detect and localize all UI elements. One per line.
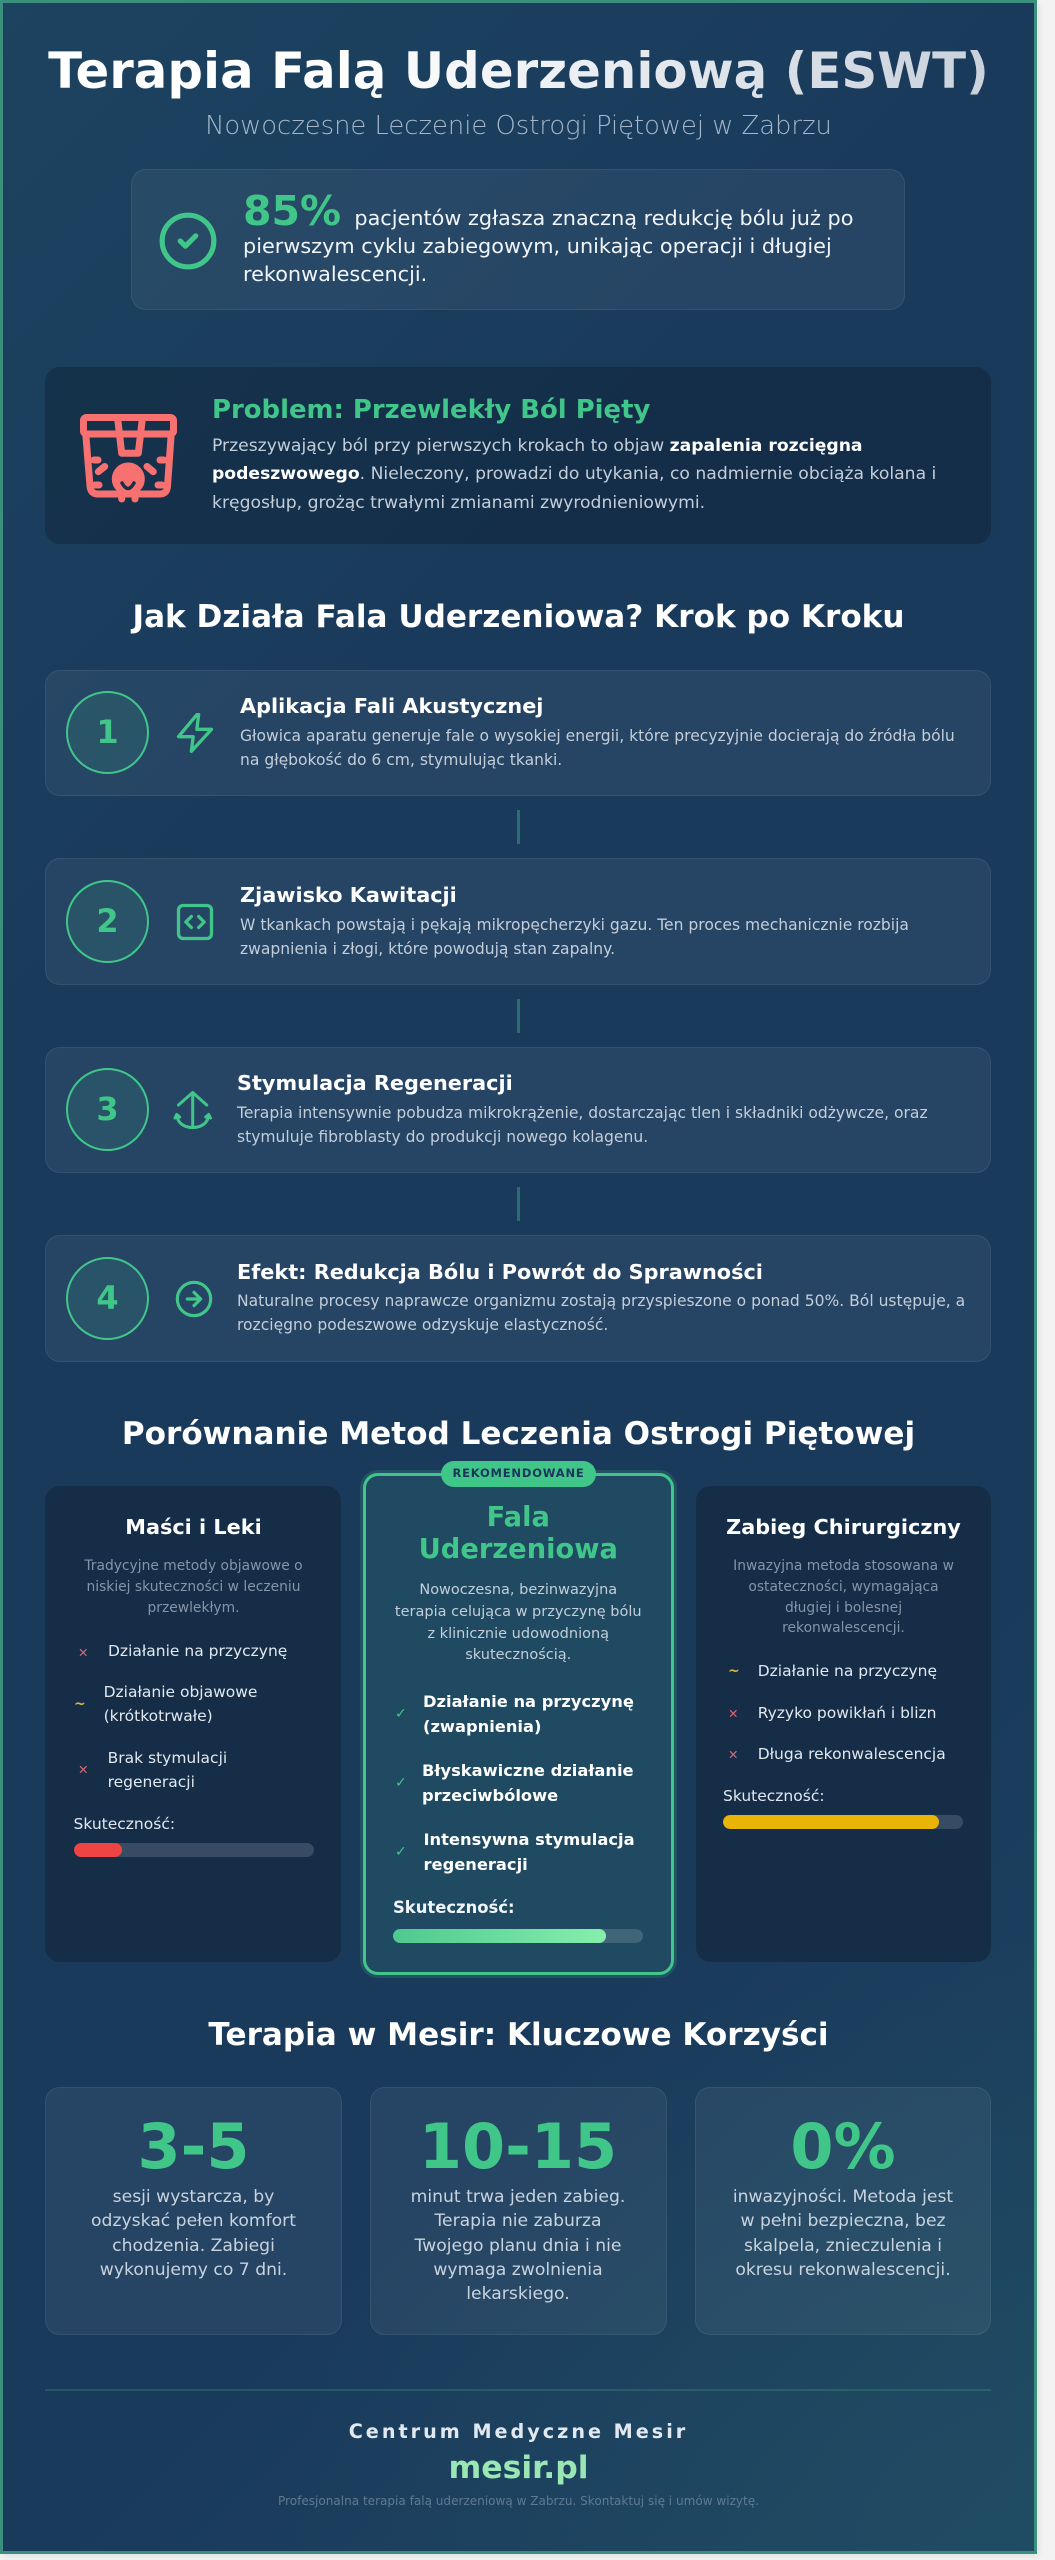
- card 2 description: terapia celująca w przyczynę bólu: [395, 1604, 642, 1620]
- sessions text: [91, 2187, 296, 2280]
- footer website: mesir.pl: [448, 2450, 589, 2486]
- panel: ointments and drugs: [45, 1486, 341, 1962]
- callout text: [243, 187, 853, 286]
- panel: step 3: [45, 1046, 991, 1173]
- card 1 description: przewlekłym.: [148, 1600, 239, 1616]
- card 3 item 2: Ryzyko powikłań i blizn: [758, 1704, 937, 1722]
- icon: anchor arrows: [174, 1090, 212, 1129]
- icon: arrow circle: [176, 1280, 212, 1318]
- card 1 item 1: ✕: [78, 1645, 88, 1660]
- callout text: 85% pacjentów zgłasza znaczną redukcję bólu już po: [243, 187, 853, 235]
- footer note: Profesjonalna terapia falą uderzeniową w Zabrzu. Skontaktuj się i umów wizytę.: [278, 2494, 759, 2508]
- heading: how it works: Jak Działa Fala Uderzeniowa? Krok po Kroku: [132, 599, 904, 635]
- card 2 item 1: [395, 1692, 634, 1736]
- panel: problem: [45, 367, 991, 544]
- non-invasive text: w pełni bezpieczna, bez: [740, 2211, 946, 2231]
- card 2 description: Nowoczesna, bezinwazyjna: [419, 1582, 617, 1598]
- card 3 effectiveness bar: [723, 1815, 963, 1829]
- heading: comparison: Porównanie Metod Leczenia Ostrogi Piętowej: [122, 1416, 915, 1452]
- step 3 text: Terapia intensywnie pobudza mikrokrążenie, dostarczając tlen i składniki odżywcze, oraz: [237, 1104, 928, 1122]
- step 3 number: 3: [96, 1090, 119, 1128]
- card 2 item 3: [395, 1830, 635, 1874]
- card 1 effectiveness label: Skuteczność:: [74, 1815, 175, 1833]
- non-invasive text: skalpela, znieczulenia i: [744, 2236, 942, 2256]
- step 1 text: [240, 727, 955, 769]
- card 2 title: [419, 1502, 618, 1565]
- card 2 item 1: ✓: [395, 1706, 407, 1722]
- connector 3: [517, 1187, 520, 1221]
- card 1 item 3: Brak stymulacji: [108, 1749, 227, 1767]
- card 2 effectiveness bar: [393, 1929, 643, 1943]
- sessions text: chodzenia. Zabiegi: [112, 2236, 275, 2256]
- panel: step 1: [45, 670, 991, 796]
- card 1 item 1: Działanie na przyczynę: [108, 1642, 287, 1660]
- card 1 item 3: regeneracji: [108, 1773, 195, 1791]
- card 2 description: z klinicznie udowodnioną: [427, 1626, 609, 1642]
- callout text: rekonwalescencji.: [243, 262, 427, 286]
- card 2 item 2: [395, 1761, 634, 1805]
- icon: code square: [176, 904, 214, 940]
- callout text: pierwszym cyklu zabiegowym, unikając operacji i długiej: [243, 234, 832, 258]
- step 4 title: Efekt: Redukcja Bólu i Powrót do Sprawności: [237, 1260, 763, 1284]
- card 3 item 3: ✕: [728, 1747, 738, 1762]
- non-invasive text: inwazyjności. Metoda jest: [733, 2187, 953, 2207]
- step 1 number: 1: [96, 713, 119, 751]
- panel: recommended shockwave: [362, 1473, 674, 1975]
- minutes text: lekarskiego.: [466, 2284, 570, 2304]
- card 2 item 3: ✓: [395, 1844, 407, 1860]
- footer clinic name: Centrum Medyczne Mesir: [349, 2420, 688, 2443]
- icon: lightning: [176, 713, 214, 753]
- card 3 item 1: ~: [728, 1663, 740, 1679]
- card 3 item 3: Długa rekonwalescencja: [758, 1745, 946, 1763]
- card 3 item 1: Działanie na przyczynę: [758, 1662, 937, 1680]
- sessions text: sesji wystarcza, by: [113, 2187, 274, 2207]
- card 3 description: długiej i bolesnej: [785, 1600, 902, 1616]
- sessions number: 3-5: [137, 2110, 250, 2183]
- card 1 item 2: (krótkotrwałe): [104, 1707, 213, 1725]
- minutes text: minut trwa jeden zabieg.: [411, 2187, 625, 2207]
- card 3 description: ostateczności, wymagająca: [748, 1579, 939, 1595]
- step 2 number: [66, 880, 149, 962]
- card 1 description: Tradycyjne metody objawowe o: [84, 1558, 303, 1574]
- problem heading: Problem: Przewlekły Ból Pięty: [212, 395, 650, 425]
- card 3 description: rekonwalescencji.: [782, 1620, 905, 1636]
- card 1 item 2: Działanie objawowe: [104, 1683, 257, 1701]
- panel: step 2: [45, 858, 991, 984]
- step 3 number: [66, 1068, 149, 1151]
- non-invasive number: 0%: [790, 2110, 896, 2183]
- card 2 item 1: Działanie na przyczynę: [423, 1692, 634, 1711]
- panel: key statistic callout: [131, 169, 905, 310]
- step 1 title: Aplikacja Fali Akustycznej: [240, 694, 543, 718]
- card 3 effectiveness label: Skuteczność:: [723, 1787, 825, 1805]
- card 3 description: Inwazyjna metoda stosowana w: [733, 1558, 954, 1574]
- non-invasive text: [733, 2187, 953, 2280]
- card 3 description: [733, 1558, 954, 1636]
- card 2 item 3: regeneracji: [424, 1855, 528, 1874]
- step 1 text: na głębokość do 6 cm, stymulując tkanki.: [240, 751, 562, 769]
- minutes number: 10-15: [419, 2110, 617, 2183]
- problem text: Przeszywający ból przy pierwszych krokach to objaw zapalenia rozcięgna: [212, 436, 863, 456]
- step 3 text: stymuluje fibroblasty do produkcji nowego kolagenu.: [237, 1128, 648, 1146]
- panel: minutes benefit: [370, 2087, 666, 2335]
- heading: benefits: Terapia w Mesir: Kluczowe Korzyści: [208, 2017, 829, 2053]
- panel: step 4: [45, 1235, 991, 1362]
- connector 1: [517, 810, 520, 844]
- step 4 text: Naturalne procesy naprawcze organizmu zostają przyspieszone o ponad 50%. Ból ustępuje, a: [237, 1292, 965, 1310]
- step 4 number: [66, 1256, 149, 1340]
- card 2 title: Fala: [487, 1502, 550, 1533]
- non-invasive text: okresu rekonwalescencji.: [735, 2260, 951, 2280]
- card 2 item 2: przeciwbólowe: [422, 1786, 558, 1805]
- badge: recommended: [441, 1461, 596, 1486]
- card 2 item 1: (zwapnienia): [423, 1717, 541, 1736]
- card 1 item 2: [74, 1683, 257, 1725]
- card 1 item 3: ✕: [78, 1762, 88, 1777]
- problem text: [212, 436, 936, 513]
- connector 2: [517, 999, 520, 1033]
- step 4 number: 4: [96, 1278, 119, 1316]
- sessions text: odzyskać pełen komfort: [91, 2211, 296, 2231]
- panel: non-invasive benefit: [695, 2087, 991, 2335]
- step 4 text: [237, 1292, 965, 1334]
- minutes text: Twojego planu dnia i nie: [414, 2236, 622, 2256]
- step 2 title: Zjawisko Kawitacji: [240, 882, 457, 906]
- step 2 text: zwapnienia i złogi, które powodują stan zapalny.: [240, 940, 615, 958]
- step 4 text: rozcięgno podeszwowe odzyskuje elastyczność.: [237, 1316, 608, 1334]
- card 1 effectiveness bar: [74, 1842, 314, 1856]
- card 2 description: [395, 1582, 642, 1663]
- card 2 item 2: ✓: [395, 1775, 407, 1791]
- card 1 item 2: ~: [74, 1696, 86, 1712]
- minutes text: wymaga zwolnienia: [433, 2260, 603, 2280]
- panel: sessions benefit: [45, 2087, 342, 2335]
- sessions text: wykonujemy co 7 dni.: [100, 2260, 287, 2280]
- problem text: podeszwowego. Nieleczony, prowadzi do utykania, co nadmiernie obciąża kolana i: [212, 464, 936, 484]
- icon: check circle: [160, 212, 216, 270]
- card 1 description: niskiej skuteczności w leczeniu: [86, 1579, 301, 1595]
- card 3 item 2: ✕: [728, 1706, 738, 1721]
- step 3 text: [236, 1104, 928, 1146]
- card 2 title: Uderzeniowa: [419, 1534, 618, 1565]
- step 2 number: 2: [96, 902, 119, 940]
- minutes text: [411, 2187, 625, 2304]
- panel: surgery: [696, 1486, 991, 1962]
- card 2 description: skutecznością.: [465, 1647, 571, 1663]
- step 1 text: Głowica aparatu generuje fale o wysokiej energii, które precyzyjnie docierają do źródła bólu: [240, 727, 955, 745]
- icon: painful heel: [80, 414, 177, 502]
- card 3 title: Zabieg Chirurgiczny: [726, 1515, 961, 1539]
- step 3 title: Stymulacja Regeneracji: [237, 1070, 513, 1094]
- problem text: kręgosłup, grożąc trwałymi zmianami zwyrodnieniowymi.: [212, 493, 705, 513]
- title: Terapia Falą Uderzeniową (ESWT): [48, 42, 989, 100]
- card 1 title: Maści i Leki: [125, 1515, 262, 1539]
- step 2 text: [240, 916, 909, 958]
- card 1 description: [84, 1558, 303, 1616]
- badge: recommended: REKOMENDOWANE: [452, 1466, 585, 1480]
- card 2 effectiveness label: Skuteczność:: [393, 1898, 515, 1917]
- subtitle: Nowoczesne Leczenie Ostrogi Piętowej w Zabrzu: [205, 111, 832, 141]
- minutes text: Terapia nie zaburza: [434, 2211, 602, 2231]
- card 2 item 2: Błyskawiczne działanie: [422, 1761, 634, 1780]
- card 1 item 3: [78, 1749, 227, 1791]
- step 1 number: [66, 691, 149, 774]
- step 2 text: W tkankach powstają i pękają mikropęcherzyki gazu. Ten proces mechanicznie rozbija: [240, 916, 909, 934]
- card 2 item 3: Intensywna stymulacja: [424, 1830, 635, 1849]
